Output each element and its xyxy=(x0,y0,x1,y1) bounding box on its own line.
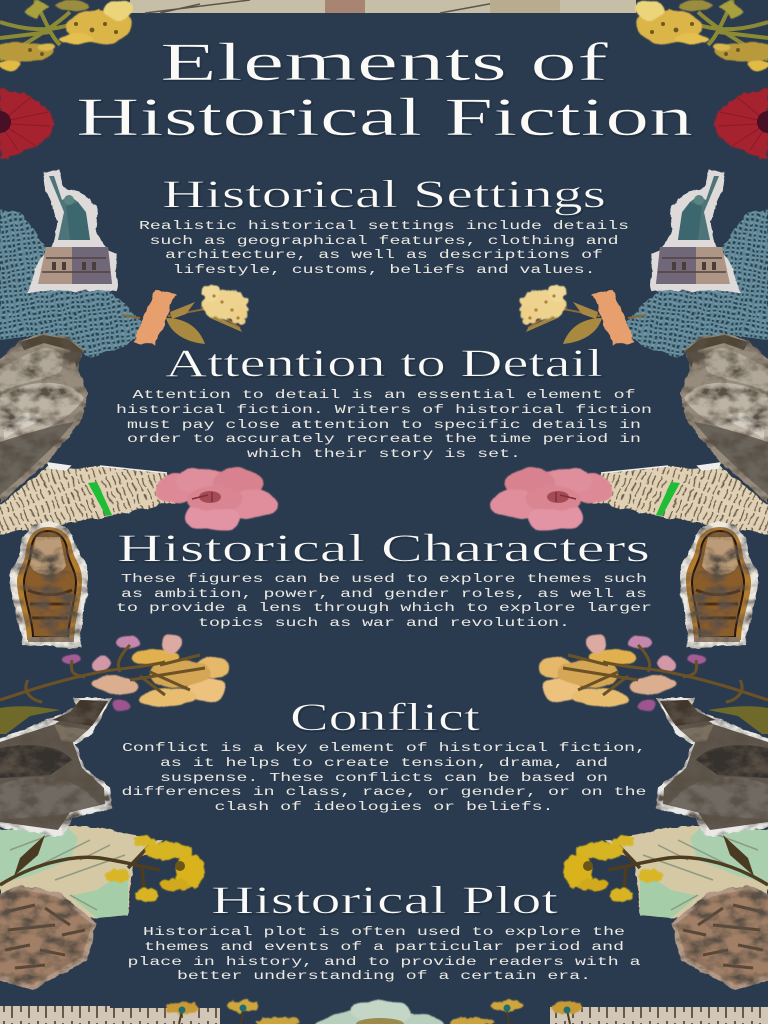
body text: lifestyle, customs, beliefs and values. xyxy=(172,264,596,277)
body text: architecture, as well as descriptions of xyxy=(165,249,603,262)
title: Historical Fiction xyxy=(76,87,693,147)
body text: suspense. These conflicts can be based on xyxy=(160,772,608,785)
heading: Conflict xyxy=(290,696,480,739)
body text: Attention to detail is an essential element of xyxy=(132,389,636,402)
newspaper scrap, right xyxy=(575,463,768,534)
body text: historical fiction. Writers of historical fiction xyxy=(116,404,652,417)
title: Elements of xyxy=(160,32,608,92)
heading: Historical Settings xyxy=(162,173,606,216)
body text: better understanding of a certain era. xyxy=(177,970,591,983)
body text: as it helps to create tension, drama, and xyxy=(160,757,608,770)
warrior statue, left xyxy=(0,698,112,837)
golden flower, left xyxy=(0,835,205,902)
warrior statue, right xyxy=(656,698,768,837)
newspaper scrap, left xyxy=(0,463,193,534)
orange tape and flower, left xyxy=(122,285,249,345)
body text xyxy=(139,220,629,277)
pink flower, left xyxy=(156,468,277,531)
section: historical plot xyxy=(128,879,641,983)
heading: Historical Plot xyxy=(211,879,558,922)
body text: clash of ideologies or beliefs. xyxy=(214,801,554,814)
section: conflict xyxy=(122,696,647,814)
blossom branch, right xyxy=(538,633,768,734)
net fabric, right xyxy=(623,210,768,358)
body text xyxy=(116,573,652,630)
yellow pressed flowers, top right xyxy=(635,0,768,70)
yellow pressed flowers, top left xyxy=(0,0,133,70)
heading: Attention to Detail xyxy=(165,342,603,385)
statue of liberty cutout, right xyxy=(651,170,740,292)
body text: Historical plot is often used to explore the xyxy=(143,926,625,939)
clay tablet, left xyxy=(0,885,97,990)
body text xyxy=(116,389,652,461)
marble figure, right xyxy=(680,333,768,503)
heading: Historical Characters xyxy=(117,527,650,570)
body text: order to accurately recreate the time period in xyxy=(127,433,641,446)
body text: must pay close attention to specific details in xyxy=(127,419,641,432)
body text: topics such as war and revolution. xyxy=(198,617,570,630)
marble figure, left xyxy=(0,333,88,503)
section: historical settings xyxy=(139,173,629,277)
body text: Realistic historical settings include details xyxy=(139,220,629,233)
body text: These figures can be used to explore themes such xyxy=(121,573,647,586)
pink flower, right xyxy=(491,468,612,531)
body text: such as geographical features, clothing and xyxy=(150,235,618,248)
red flower, left xyxy=(0,88,54,158)
map scrap, left xyxy=(0,827,163,918)
body text: as ambition, power, and gender roles, as well as xyxy=(121,588,647,601)
body text xyxy=(122,742,647,814)
top photo strip xyxy=(130,0,636,13)
section: historical characters xyxy=(116,527,652,630)
body text xyxy=(128,926,641,983)
body text: themes and events of a particular period and xyxy=(144,941,624,954)
body text: Conflict is a key element of historical fiction, xyxy=(122,742,646,755)
clay tablet, right xyxy=(671,885,768,990)
orange tape and flower, right xyxy=(519,285,646,345)
sarcophagus, right xyxy=(680,522,758,648)
bottom paper strips and flowers xyxy=(0,1000,768,1024)
title xyxy=(76,32,693,147)
statue of liberty cutout, left xyxy=(28,170,117,292)
red flower, right xyxy=(714,88,768,158)
section: attention to detail xyxy=(116,342,652,461)
body text: differences in class, race, or gender, or on the xyxy=(122,786,647,799)
body text: place in history, and to provide readers with a xyxy=(128,956,641,969)
body text: to provide a lens through which to explore larger xyxy=(116,602,652,615)
map scrap, right xyxy=(605,827,768,918)
golden flower, right xyxy=(563,835,768,902)
sarcophagus, left xyxy=(10,522,88,648)
net fabric, left xyxy=(0,210,145,358)
blossom branch, left xyxy=(0,633,230,734)
body text: which their story is set. xyxy=(247,448,521,461)
